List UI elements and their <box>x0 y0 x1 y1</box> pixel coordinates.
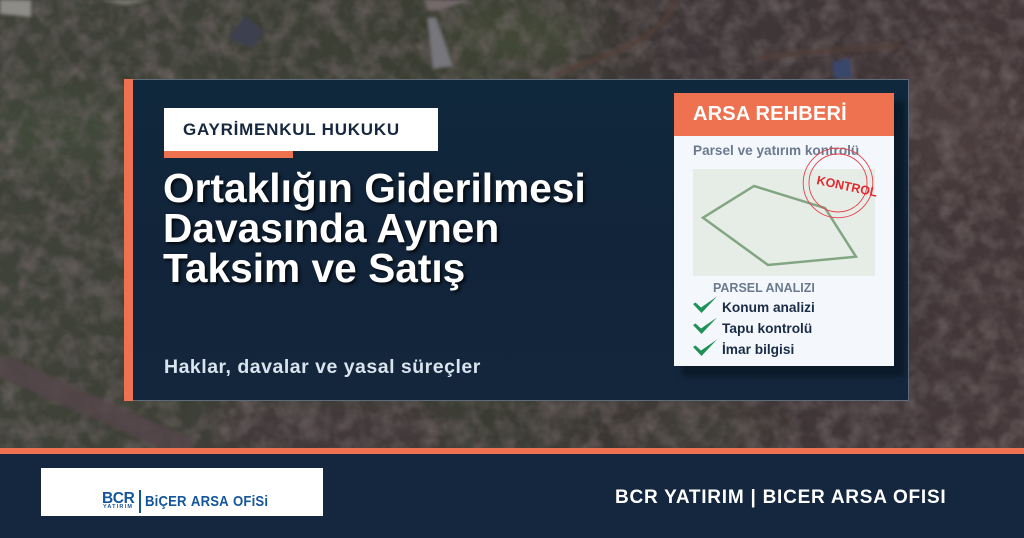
title: Ortaklığın Giderilmesi <box>163 165 586 211</box>
tag: category label <box>164 108 438 158</box>
logo BCR word: BCR <box>102 490 134 507</box>
item: tapu kontrolü <box>693 318 812 336</box>
card subtitle: Parsel ve yatırım kontrolü <box>693 143 859 158</box>
logo: Biçer Arsa Ofisi: BiÇER ARSA OFiSi <box>145 493 268 510</box>
panel: guide card <box>674 93 894 366</box>
parcel analysis heading: PARSEL ANALIZI <box>713 281 815 295</box>
item: tapu kontrolü: Tapu kontrolü <box>722 321 812 336</box>
title: Taksim ve Satış <box>163 245 465 291</box>
card heading: ARSA REHBERİ <box>693 103 847 125</box>
accent bar <box>124 79 133 401</box>
item: imar bilgisi <box>693 340 794 357</box>
item: imar bilgisi: İmar bilgisi <box>722 342 794 357</box>
footer brand text: BCR YATIRIM | BICER ARSA OFISI <box>615 487 946 508</box>
logo Yatırım word: YATIRIM <box>103 504 133 510</box>
item: konum analizi <box>693 296 815 315</box>
card header <box>674 93 894 136</box>
logo box <box>41 468 323 516</box>
tag accent underline <box>164 151 293 158</box>
tag text: GAYRİMENKUL HUKUKU <box>183 120 400 139</box>
logo: BCR Yatırım <box>102 490 134 510</box>
logo divider <box>139 490 141 513</box>
title <box>163 165 586 294</box>
card shadow <box>682 101 904 376</box>
parcel map <box>693 169 875 276</box>
item: konum analizi: Konum analizi <box>722 300 815 315</box>
stamp: kontrol <box>802 148 879 218</box>
tag background <box>164 108 438 151</box>
footer band <box>0 448 1024 538</box>
checklist <box>693 296 815 357</box>
footer accent line <box>0 448 1024 454</box>
title: Davasında Aynen <box>163 205 499 251</box>
subtitle: Haklar, davalar ve yasal süreçler <box>164 356 481 378</box>
panel: main dark overlay <box>124 79 909 401</box>
stamp: kontrol: KONTROL <box>815 173 879 200</box>
